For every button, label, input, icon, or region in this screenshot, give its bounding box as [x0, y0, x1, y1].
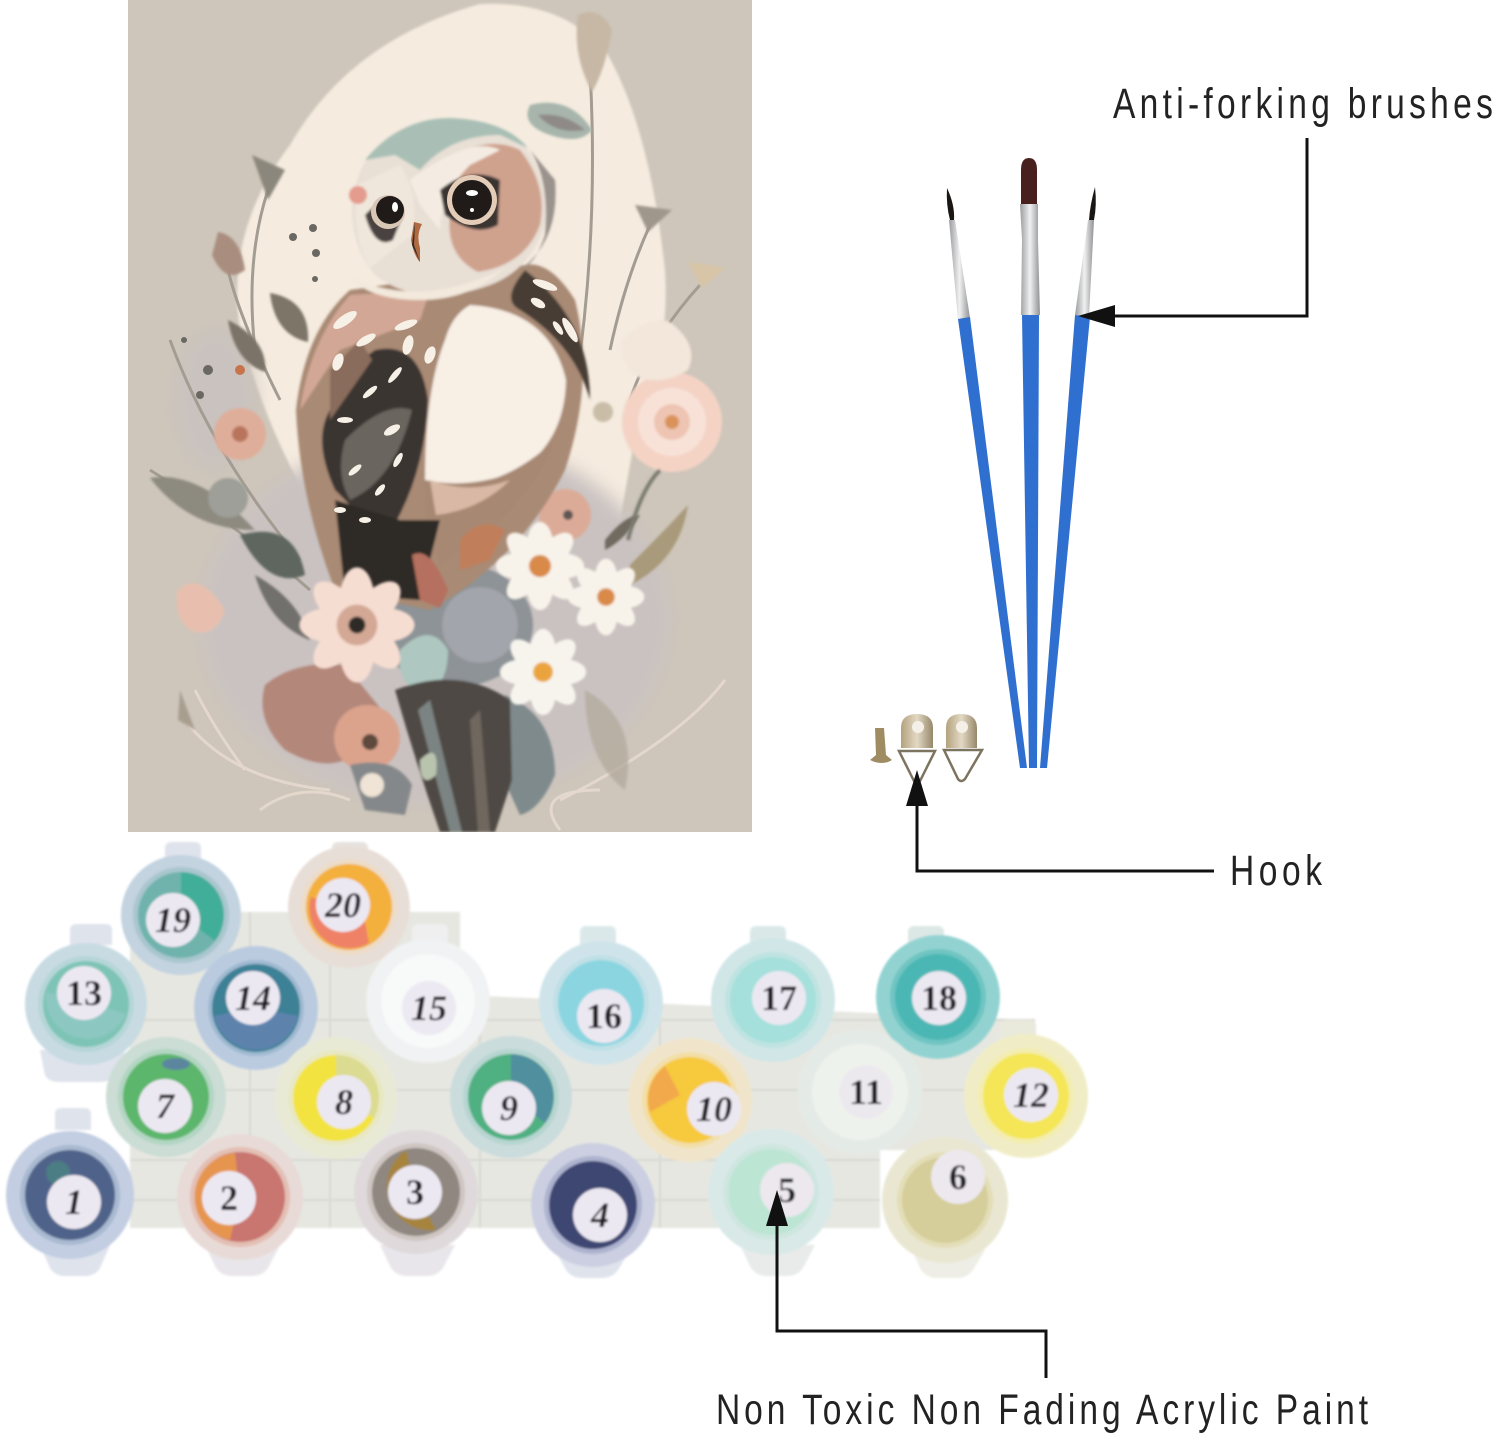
pot 3: 3	[406, 1172, 424, 1212]
pot 4: 4	[590, 1195, 609, 1235]
pot 5	[708, 1129, 834, 1255]
label: hook: Hook	[1230, 847, 1323, 895]
foliage and flowers around the owl	[150, 12, 725, 832]
pot 3	[354, 1130, 478, 1254]
pot 20: 20	[324, 885, 361, 925]
pot 12: 12	[1013, 1075, 1049, 1115]
pot 20	[288, 846, 410, 968]
owl head	[352, 136, 545, 293]
lilac wash behind bouquet	[292, 460, 623, 522]
owl body	[296, 118, 590, 610]
panel: owl painting	[128, 0, 752, 832]
pot 10	[628, 1038, 752, 1162]
pot 9	[450, 1036, 572, 1158]
pot 15: 15	[411, 988, 447, 1028]
pot 1	[6, 1131, 134, 1259]
pot tabs	[40, 842, 1036, 1278]
pot 2: 2	[220, 1178, 238, 1218]
pot 13: 13	[66, 973, 102, 1013]
pot 6: 6	[949, 1157, 967, 1197]
brush: right	[1040, 187, 1096, 768]
label: brushes: Anti-forking brushes	[1113, 80, 1493, 128]
arrow: hook	[906, 770, 1214, 871]
pot 8: 8	[335, 1082, 353, 1122]
pot tray	[130, 912, 1035, 1228]
pot 14	[194, 946, 318, 1070]
pot 6	[882, 1137, 1008, 1263]
pot 9: 9	[500, 1088, 518, 1128]
halo background	[237, 4, 666, 520]
pot 17	[711, 938, 835, 1062]
arrow: brushes	[1078, 138, 1307, 327]
pot 5: 5	[778, 1170, 796, 1210]
brush: left	[947, 188, 1027, 768]
pot 7: 7	[156, 1086, 176, 1126]
pot 13	[25, 943, 147, 1065]
bouquet blossoms	[299, 320, 722, 715]
arrow: paint	[766, 1190, 1046, 1378]
feather highlights	[330, 277, 580, 523]
pot 11	[798, 1030, 922, 1154]
pot 2	[177, 1134, 303, 1260]
pot 4	[531, 1143, 655, 1267]
pot 1: 1	[65, 1182, 83, 1222]
pot 8	[275, 1037, 397, 1159]
label: paint: Non Toxic Non Fading Acrylic Paint	[716, 1386, 1368, 1434]
stems	[150, 70, 700, 590]
panel: paint pots	[6, 842, 1088, 1278]
pot 19	[121, 855, 241, 975]
pot 18	[876, 935, 1000, 1059]
pot 14: 14	[235, 978, 271, 1018]
pot 10: 10	[696, 1089, 732, 1129]
pot 7	[106, 1037, 226, 1157]
pot 16: 16	[586, 996, 622, 1036]
pot 16	[539, 941, 663, 1065]
pot 15	[366, 939, 490, 1063]
pot 18: 18	[921, 978, 957, 1018]
pot 17: 17	[761, 978, 797, 1018]
owl eyes and beak	[371, 175, 497, 262]
pot 12	[964, 1034, 1088, 1158]
small dark paint flecks	[181, 224, 320, 399]
pot 19: 19	[155, 900, 191, 940]
icon: hooks and screw	[870, 714, 982, 783]
pot 11: 11	[849, 1072, 883, 1112]
brush: middle	[1020, 158, 1040, 768]
feet	[412, 553, 448, 608]
